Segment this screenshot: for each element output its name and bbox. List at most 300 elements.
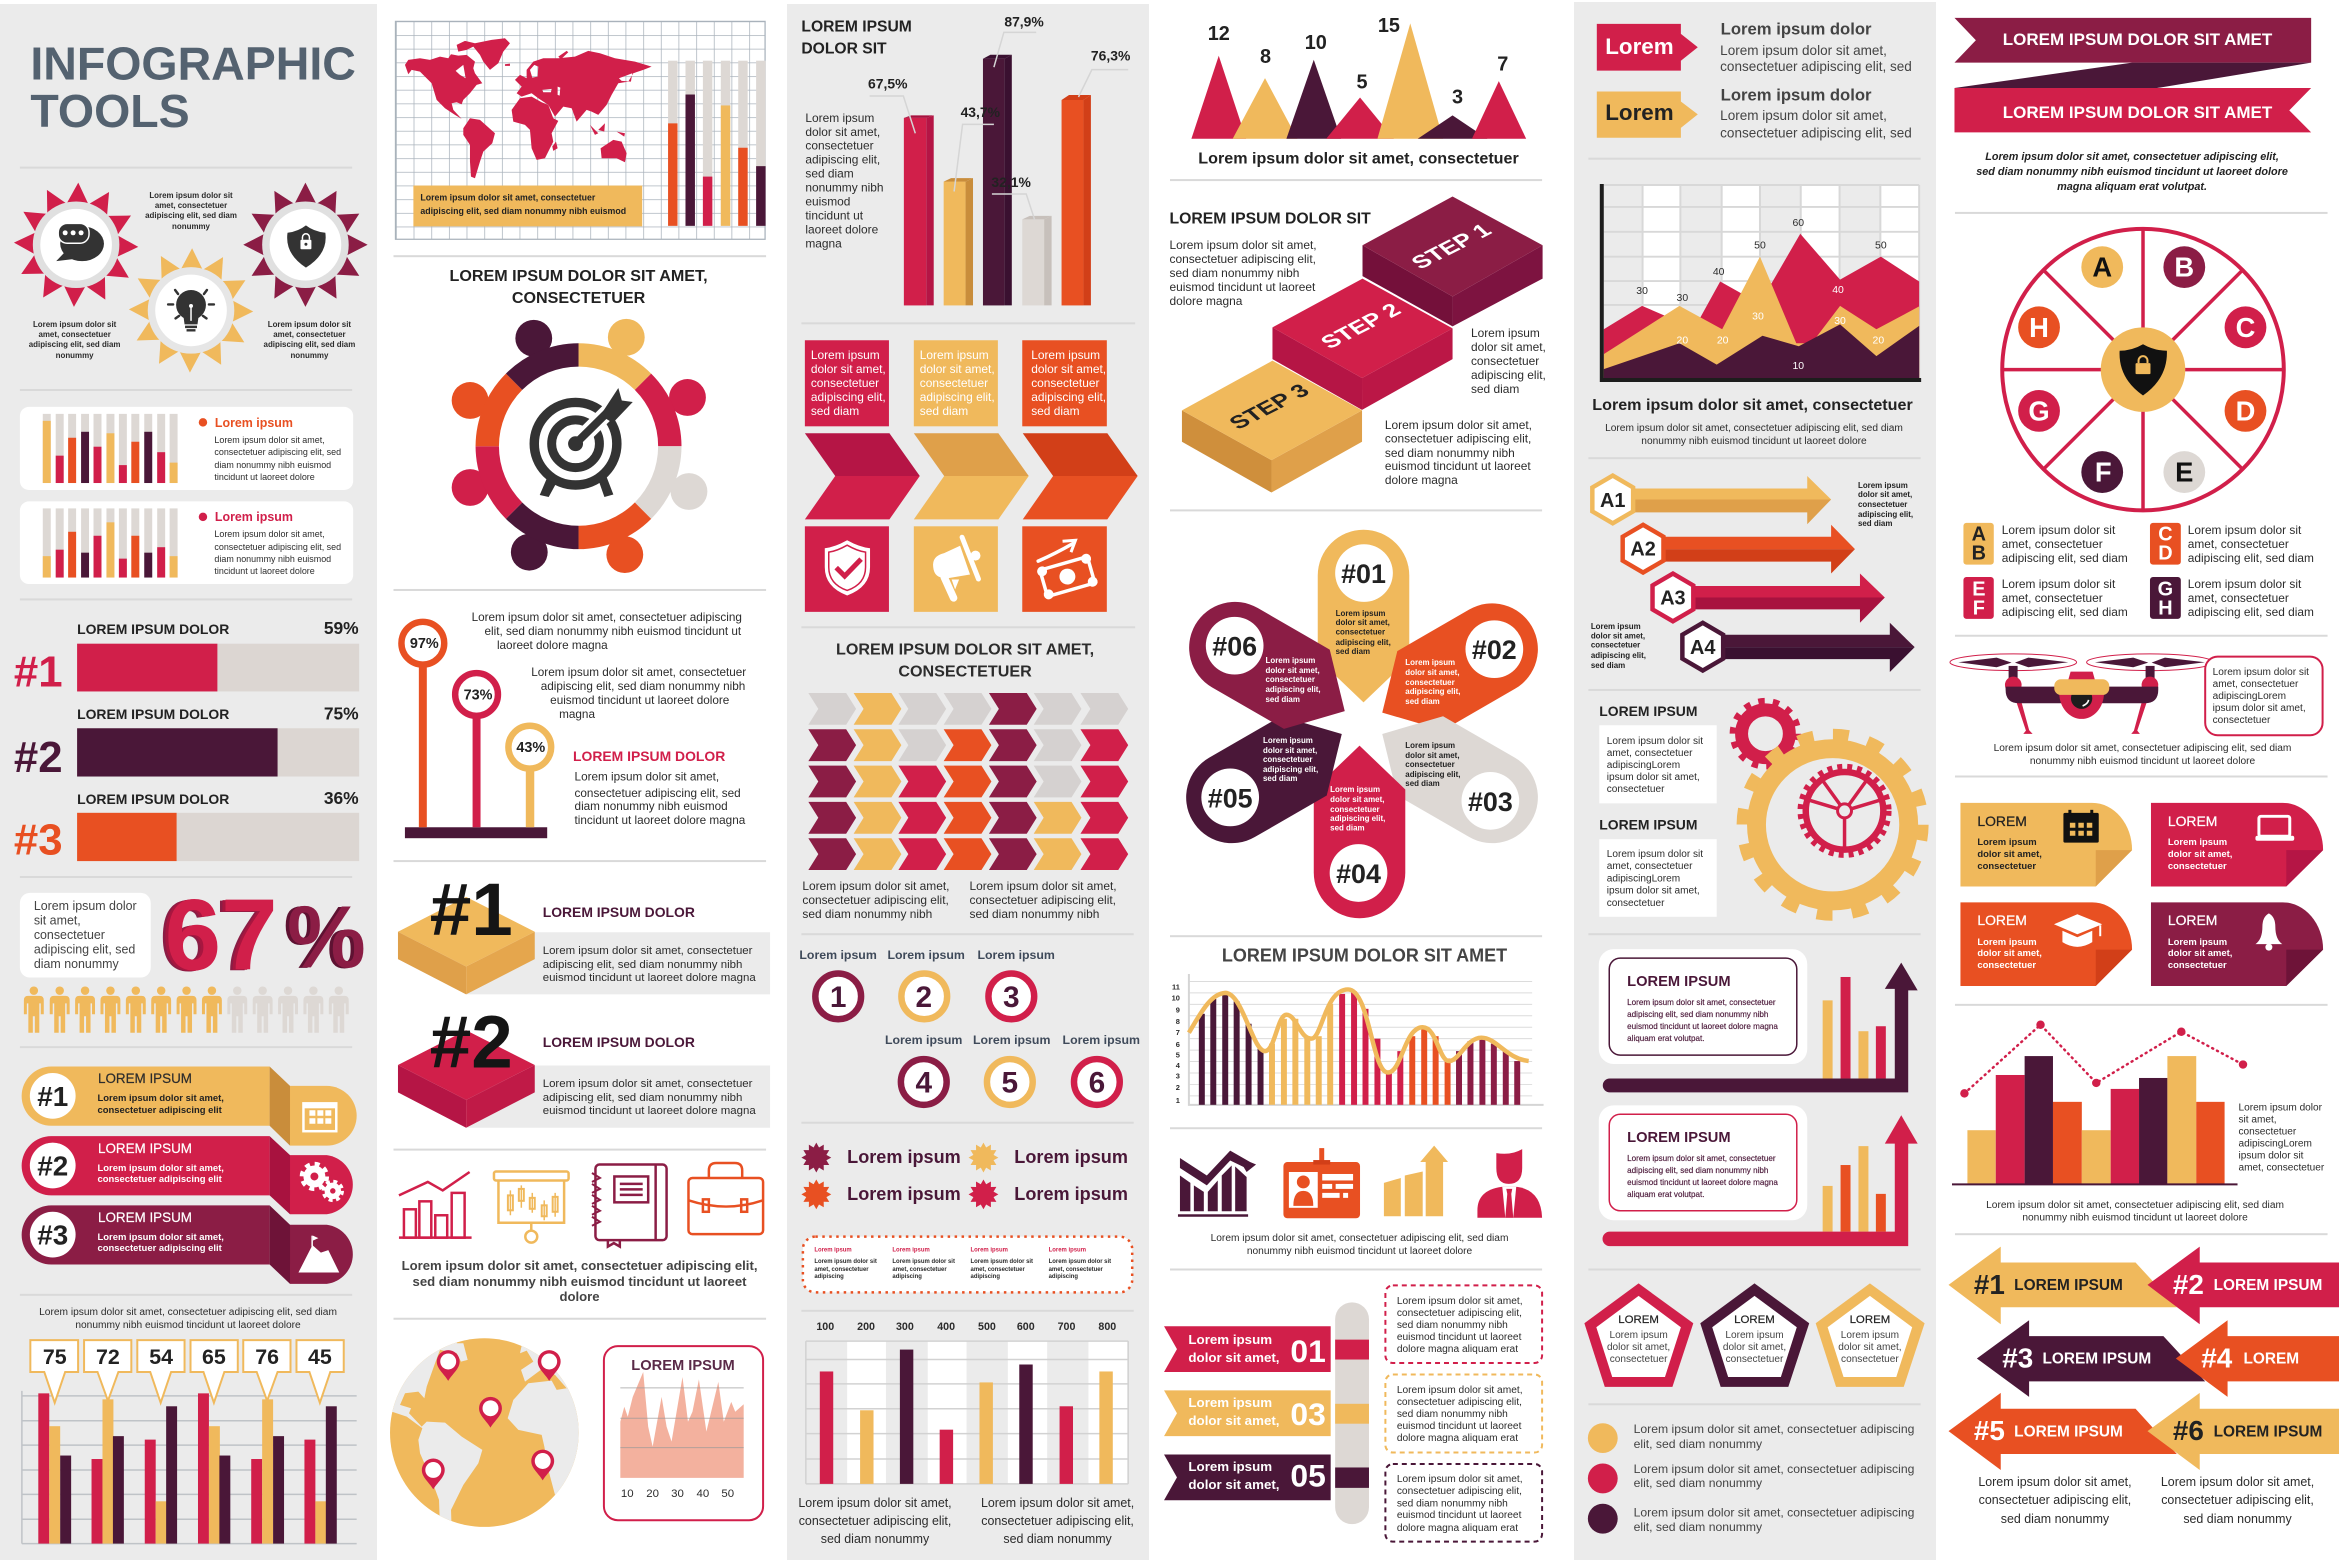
mountain triangles chart: 10: [1305, 32, 1327, 54]
globe: land and ocean: [390, 1338, 579, 1527]
dashed note 3: consectetuer adipiscing elit,: [1397, 1486, 1522, 1497]
text: drone caption: Lorem ipsum dolor sit amet, consectetuer adipiscing elit, sed diam: [1994, 743, 2291, 754]
icon: presentation board: [494, 1171, 569, 1243]
letter wheel: E: [2175, 457, 2193, 488]
folded card wine: consectetuer: [2168, 960, 2227, 971]
growth card 2: Lorem ipsum dolor sit amet, consectetuer: [1627, 1154, 1776, 1163]
area chart card: 50: [721, 1488, 734, 1500]
area chart card: 20: [646, 1488, 659, 1500]
panel: text box yellow: sed diam: [920, 404, 968, 418]
text: step 3 description: euismod tincidunt ut laoreet: [1385, 459, 1531, 473]
area chart: 30: [1752, 311, 1764, 322]
note: gear text 1: ipsum dolor sit amet,: [1607, 772, 1700, 783]
iso block #1: adipiscing elit, sed diam nonummy nibh: [543, 959, 742, 971]
callout: 67 percent text: Lorem ipsum dolor: [34, 899, 137, 913]
petal #01: consectetuer: [1336, 628, 1385, 637]
tag 01: 01: [1290, 1333, 1326, 1369]
callout: drone note: adipiscingLorem: [2213, 691, 2286, 702]
folded card crimson: dolor sit amet,: [2168, 849, 2232, 860]
folded card orange: consectetuer: [1977, 960, 2036, 971]
panel: text box crimson: adipiscing elit,: [811, 390, 886, 404]
area chart: 50: [1754, 241, 1766, 252]
tag 01: [1164, 1326, 1331, 1372]
ribbon #1: consectetuer adipiscing elit: [98, 1105, 223, 1116]
wave bar chart: 11: [1172, 982, 1180, 991]
dashed note 2: Lorem ipsum dolor sit amet,: [1397, 1385, 1523, 1396]
text: chart caption right: Lorem ipsum dolor sit amet,: [981, 1496, 1134, 1510]
dotted callout box: Lorem ipsum dolor sit: [1049, 1259, 1111, 1265]
text: badge caption top: amet, consectetuer: [155, 201, 227, 210]
note: gear text 2: LOREM IPSUM: [1599, 817, 1697, 833]
text: 3D bars description: adipiscing elit,: [805, 153, 880, 167]
text: step 2 description: sed diam: [1471, 382, 1519, 396]
dashed note 1: euismod tincidunt ut laoreet: [1397, 1332, 1522, 1343]
pentagon 2: dolor sit amet,: [1723, 1342, 1786, 1353]
icon: chat badge: [12, 180, 140, 309]
panel: mini bar card 1: tincidunt ut laoreet dolore: [214, 472, 315, 482]
text: badge caption left: nonummy: [56, 351, 94, 360]
text: arrow note left: dolor sit amet,: [1591, 632, 1645, 641]
wave bar chart: 7: [1176, 1028, 1180, 1037]
pentagon 3: Lorem ipsum: [1841, 1330, 1899, 1341]
3D bar chart: 32,1%: [991, 174, 1031, 190]
numbered circles: Lorem ipsum: [1063, 1033, 1140, 1047]
folded card yellow: LOREM: [1977, 813, 2027, 829]
heading: 3D bars: DOLOR SIT: [801, 41, 887, 58]
mountain triangles chart: [1191, 15, 1526, 139]
progress bar #1: LOREM IPSUM DOLOR: [77, 621, 229, 637]
petal #03: #03: [1468, 787, 1513, 817]
area chart: 30: [1636, 286, 1648, 297]
dot list: elit, sed diam nonummy: [1634, 1476, 1763, 1490]
note: gear text 1: LOREM IPSUM: [1599, 703, 1697, 719]
text: step 3 description: sed diam nonummy nibh: [1385, 446, 1515, 460]
text: steps intro: dolore magna: [1170, 294, 1243, 308]
text: arrow note right: dolor sit amet,: [1858, 490, 1912, 499]
petal #02: sed diam: [1405, 697, 1440, 706]
numbered circles: Lorem ipsum: [885, 1033, 962, 1047]
progress bar #2: [14, 703, 359, 782]
text: 3D bars description: Lorem ipsum: [805, 111, 874, 125]
ribbon #2: LOREM IPSUM: [98, 1141, 192, 1156]
panel: text box crimson: Lorem ipsum: [811, 348, 880, 362]
icon: calendar black: [2063, 810, 2099, 843]
starburst legend: [801, 1143, 1128, 1209]
heading: chevron matrix: CONSECTETUER: [898, 663, 1032, 681]
tag 03: [1164, 1390, 1331, 1436]
petal #06: dolor sit amet,: [1266, 666, 1320, 675]
iso block #2: #2: [430, 1000, 513, 1084]
text: arrow note left: Lorem ipsum: [1591, 622, 1641, 631]
petal #05: Lorem ipsum: [1263, 736, 1313, 745]
big number 67 percent: %: [284, 888, 362, 987]
arrow A2: A2: [1630, 539, 1656, 561]
dotted callout box: Lorem ipsum: [971, 1248, 1008, 1254]
text: step 3 description: Lorem ipsum dolor sit amet,: [1385, 418, 1532, 432]
icon: briefcase: [688, 1163, 763, 1234]
dotted callout box: amet, consectetuer: [892, 1267, 947, 1273]
mountain triangles chart: 12: [1208, 23, 1230, 45]
gears: [1733, 701, 1923, 915]
map caption: Lorem ipsum dolor sit amet, consectetuer: [420, 192, 596, 202]
text: badge caption right: nonummy: [290, 351, 329, 360]
note: gear text 2: amet, consectetuer: [1607, 861, 1693, 872]
text: step 3 description: dolore magna: [1385, 473, 1458, 487]
pentagon 2: LOREM: [1734, 1314, 1775, 1326]
folded card yellow: dolor sit amet,: [1977, 849, 2042, 860]
text block: pin 1: Lorem ipsum dolor sit amet, consectetuer adipiscing: [472, 611, 742, 624]
icon: declining chart: [1178, 1151, 1256, 1217]
panel: text box yellow: [914, 340, 998, 426]
pentagon 3: LOREM: [1850, 1314, 1890, 1326]
arrow A1: A1: [1600, 490, 1625, 512]
big number 67 percent: 67: [159, 879, 272, 993]
arrow #2: #2: [2173, 1269, 2204, 1300]
petal #03: adipiscing elit,: [1405, 770, 1460, 779]
banner ribbon: LOREM IPSUM DOLOR SIT AMET: [2003, 103, 2273, 122]
petal #05: consectetuer: [1263, 755, 1312, 764]
pin chart: 43%: [516, 740, 545, 756]
legend: GH: Lorem ipsum dolor sit: [2188, 577, 2302, 591]
dotted callout box: Lorem ipsum: [1049, 1248, 1086, 1254]
progress bar #1: [14, 618, 359, 696]
arrow A2: [1623, 525, 1855, 574]
tag: Lorem yellow: [1597, 92, 1698, 138]
isometric step 1: [1363, 196, 1543, 326]
legend: CD: C: [2158, 524, 2173, 546]
panel: mini bar card 2: Lorem ipsum dolor sit amet,: [214, 529, 325, 539]
text: badge caption top: Lorem ipsum dolor sit: [149, 191, 233, 200]
text: badge caption left: Lorem ipsum dolor sit: [33, 320, 117, 329]
dotted callout box: Lorem ipsum dolor sit: [892, 1259, 955, 1265]
dashed note 3: Lorem ipsum dolor sit amet,: [1397, 1474, 1523, 1485]
growth card 2: euismod tincidunt ut laoreet dolore magna: [1627, 1178, 1778, 1187]
area chart card: [604, 1346, 763, 1520]
growth card 1: [1599, 949, 1918, 1092]
petal #05: #05: [1208, 783, 1253, 813]
callout: 67 percent text: consectetuer: [34, 928, 105, 942]
text: chart caption right: consectetuer adipiscing elit,: [981, 1514, 1134, 1528]
target wheel: [452, 319, 707, 573]
folded card crimson: Lorem ipsum: [2168, 837, 2227, 848]
area chart: 20: [1717, 336, 1729, 347]
text: tag 1 description: Lorem ipsum dolor: [1721, 19, 1872, 38]
legend: EF: adipiscing elit, sed diam: [2002, 605, 2128, 619]
isometric step 3: [1182, 361, 1362, 492]
text: bar chart note: adipiscingLorem: [2239, 1139, 2312, 1150]
petal #02: Lorem ipsum: [1405, 658, 1455, 667]
legend: AB: B: [1972, 543, 1986, 565]
ribbon #3: LOREM IPSUM: [98, 1210, 192, 1225]
grouped bar chart with callouts: 75: [43, 1345, 67, 1369]
petal #04: dolor sit amet,: [1330, 795, 1384, 804]
petal #05: adipiscing elit,: [1263, 765, 1318, 774]
text: 3D bars description: dolor sit amet,: [805, 125, 880, 139]
isometric step 2: [1272, 279, 1453, 410]
ribbon #2: Lorem ipsum dolor sit amet,: [98, 1163, 224, 1174]
petal #01: Lorem ipsum: [1336, 609, 1385, 618]
text block: pin 2: Lorem ipsum dolor sit amet, consectetuer: [531, 666, 746, 679]
mountain triangles chart: 7: [1497, 54, 1508, 76]
people pictogram: [24, 986, 349, 1033]
panel: mini bar card 2: [20, 501, 353, 584]
arrow #6: LOREM IPSUM: [2214, 1424, 2322, 1441]
banner ribbon: [1954, 18, 2311, 132]
text: step 2 description: Lorem ipsum: [1471, 326, 1540, 340]
text: arrows caption right: consectetuer adipiscing elit,: [2161, 1493, 2314, 1507]
folded card yellow: consectetuer: [1977, 861, 2036, 872]
numbered circles: 5: [1002, 1066, 1018, 1099]
text: steps intro: consectetuer adipiscing elit,: [1170, 252, 1316, 266]
dot list: Lorem ipsum dolor sit amet, consectetuer adipiscing: [1634, 1462, 1914, 1476]
text: tag 2 description: Lorem ipsum dolor sit amet,: [1720, 108, 1887, 123]
ribbon #1: #1: [37, 1081, 68, 1112]
wave bar chart: 8: [1176, 1017, 1180, 1026]
icon: line chart: [399, 1172, 472, 1238]
petal #01: sed diam: [1336, 647, 1370, 656]
isometric step 2: STEP 2: [1315, 299, 1406, 353]
petal #04: Lorem ipsum: [1330, 785, 1380, 794]
legend: AB: [1963, 523, 2128, 565]
icon: shield check: [805, 526, 889, 612]
petal #03: dolor sit amet,: [1405, 751, 1460, 760]
isometric step 3: STEP 3: [1223, 379, 1314, 433]
legend: AB: amet, consectetuer: [2002, 537, 2103, 551]
dotted callout box: adipiscing: [971, 1274, 1000, 1280]
letter wheel: B: [2174, 252, 2194, 283]
text: badge caption left: adipiscing elit, sed diam: [29, 340, 120, 349]
folded card crimson: LOREM: [2168, 813, 2217, 829]
pentagon 2: Lorem ipsum: [1725, 1330, 1784, 1341]
petal #04: sed diam: [1330, 824, 1365, 833]
column chart: 500: [978, 1321, 996, 1333]
text: arrows caption left: sed diam nonummy: [2001, 1512, 2110, 1526]
wave bar chart: 4: [1176, 1061, 1181, 1070]
dashed note 1: dolore magna aliquam erat: [1397, 1344, 1518, 1355]
iso block #1: euismod tincidunt ut laoreet dolore magna: [543, 972, 756, 984]
arrow A1: [1592, 476, 1831, 524]
dot list: [1588, 1422, 1914, 1534]
3D bar chart: [868, 13, 1130, 305]
pentagon 3: consectetuer: [1841, 1354, 1899, 1365]
area chart: 60: [1792, 218, 1804, 229]
panel: column 1 background: [0, 4, 377, 1560]
folded card orange: [1960, 902, 2132, 986]
column chart: 800: [1098, 1321, 1116, 1333]
text: 3D bars description: tincidunt ut: [805, 208, 864, 222]
dot list: Lorem ipsum dolor sit amet, consectetuer adipiscing: [1634, 1422, 1914, 1436]
dotted callout box: adipiscing: [1049, 1274, 1078, 1280]
text: tag 1 description: consectetuer adipiscing elit, sed: [1720, 59, 1912, 74]
dot list: elit, sed diam nonummy: [1634, 1437, 1763, 1451]
progress bar #3: [14, 788, 359, 865]
arrow A3: [1653, 574, 1885, 623]
tag: Lorem crimson: Lorem: [1605, 34, 1674, 59]
area chart: 20: [1677, 336, 1688, 347]
area chart: 10: [1792, 361, 1804, 372]
text: chart caption right: sed diam nonummy: [1003, 1532, 1113, 1546]
text block: pin 2: magna: [559, 708, 595, 721]
petal #02: adipiscing elit,: [1405, 687, 1460, 696]
pentagon 1: LOREM: [1618, 1314, 1659, 1326]
dotted callout box: amet, consectetuer: [971, 1267, 1025, 1273]
panel: text box crimson: sed diam: [811, 404, 859, 418]
arrow #4: LOREM: [2243, 1351, 2299, 1368]
legend: GH: adipiscing elit, sed diam: [2188, 605, 2314, 619]
grouped bar chart with callouts: [22, 1340, 357, 1544]
text: chart caption: Lorem ipsum dolor sit amet, consectetuer adipiscing elit, sed diam: [39, 1307, 337, 1318]
callout: 67 percent text: diam nonummy: [34, 957, 120, 971]
panel: mini bar card 1: diam nonummy nibh euismod: [214, 460, 331, 470]
panel: text box yellow: Lorem ipsum: [920, 348, 989, 362]
legend: EF: [1963, 577, 2128, 619]
note: gear text 1: Lorem ipsum dolor sit: [1607, 736, 1703, 747]
dashed note 3: sed diam nonummy nibh: [1397, 1498, 1508, 1509]
growth card 2: [1599, 1105, 1918, 1246]
text: tag 1 description: [1720, 19, 1912, 74]
text: chart caption left: Lorem ipsum dolor sit amet,: [798, 1496, 952, 1510]
callout: drone note: amet, consectetuer: [2213, 679, 2299, 690]
starburst legend: Lorem ipsum: [1014, 1147, 1128, 1167]
icon: drone: [1950, 654, 2213, 734]
area chart card: LOREM IPSUM: [631, 1358, 735, 1374]
petal #04: consectetuer: [1330, 805, 1380, 814]
pin chart: 97%: [410, 636, 439, 652]
legend: AB: Lorem ipsum dolor sit: [2002, 523, 2116, 537]
arrow #5: [1949, 1393, 2177, 1470]
wave bar chart: [1172, 974, 1544, 1105]
progress bar #1: 59%: [324, 618, 359, 638]
panel: mini bar card 1: Lorem ipsum: [215, 416, 293, 430]
text: bar chart caption: nonummy nibh euismod tincidunt ut laoreet dolore: [2022, 1213, 2248, 1224]
wave bar chart: 6: [1176, 1040, 1180, 1049]
dashed note 3: dolore magna aliquam erat: [1397, 1523, 1518, 1534]
letter wheel: C: [2236, 312, 2255, 343]
text: 3D bars description: consectetuer: [805, 139, 874, 153]
petal #06: consectetuer: [1266, 675, 1315, 684]
heading: target: LOREM IPSUM DOLOR SIT AMET,: [450, 267, 708, 285]
iso block #2: [398, 1000, 770, 1128]
tag 05: Lorem ipsum: [1188, 1459, 1272, 1474]
letter wheel: H: [2029, 312, 2049, 343]
text block: pin 2: euismod tincidunt ut laoreet dolore: [550, 694, 729, 707]
wave bar chart: 9: [1176, 1005, 1180, 1014]
chevron matrix: [808, 693, 1128, 870]
arrow #1: LOREM IPSUM: [2014, 1277, 2123, 1294]
text: badge caption right: adipiscing elit, sed diam: [264, 340, 355, 349]
icon: money arrow: [1022, 526, 1107, 612]
callout: drone note: Lorem ipsum dolor sit: [2213, 667, 2309, 678]
icon: notebook: [592, 1165, 667, 1247]
legend: EF: E: [1972, 578, 1985, 600]
big number 67 percent: %: [287, 888, 366, 987]
note: gear text 1: consectetuer: [1607, 784, 1665, 795]
text: italic intro: magna aliquam erat volutpat.: [2057, 181, 2207, 193]
tag 01: dolor sit amet,: [1188, 1350, 1280, 1365]
text: arrow note right: sed diam: [1858, 519, 1892, 528]
folded card crimson: consectetuer: [2168, 861, 2227, 872]
dashed note 3: [1385, 1464, 1542, 1542]
note: gear text 2: Lorem ipsum dolor sit: [1607, 849, 1703, 860]
pin chart: 73%: [464, 687, 493, 703]
numbered circles: 1: [830, 981, 846, 1014]
icon: ID card: [1283, 1148, 1360, 1218]
dashed note 1: [1385, 1285, 1542, 1363]
text: icons caption: dolore: [559, 1289, 600, 1304]
numbered circles: Lorem ipsum: [977, 948, 1055, 962]
text: 3D bars description: laoreet dolore: [805, 222, 879, 236]
big number 67 percent: [159, 878, 366, 993]
iso block #1: Lorem ipsum dolor sit amet, consectetuer: [543, 945, 753, 957]
text: 3D bars description: sed diam: [805, 167, 854, 181]
petal #01: adipiscing elit,: [1336, 638, 1391, 647]
text block: pin 1: laoreet dolore magna: [497, 639, 608, 652]
iso block #1: LOREM IPSUM DOLOR: [543, 904, 695, 920]
iso block #1: [398, 867, 770, 994]
text: chart caption left: consectetuer adipiscing elit,: [799, 1514, 951, 1528]
text: tag 2 description: [1720, 85, 1912, 140]
pentagon 1: Lorem ipsum: [1609, 1330, 1668, 1341]
petal #04: adipiscing elit,: [1330, 814, 1385, 823]
dotted callout box: amet, consectetuer: [814, 1267, 869, 1273]
text: icons caption: Lorem ipsum dolor sit amet, consectetuer adipiscing elit, sed diam: [1211, 1233, 1508, 1244]
numbered circles: Lorem ipsum: [973, 1033, 1050, 1047]
numbered circles: Lorem ipsum: [887, 948, 965, 962]
icon: growth arrow bars: [1384, 1146, 1448, 1216]
legend: CD: [2150, 523, 2314, 565]
note: gear text 1: adipiscingLorem: [1607, 760, 1680, 771]
pentagon 1: [1584, 1283, 1693, 1387]
dashed note 2: consectetuer adipiscing elit,: [1397, 1397, 1522, 1408]
legend: EF: F: [1973, 597, 1985, 619]
text: tag 2 description: consectetuer adipiscing elit, sed: [1720, 125, 1912, 140]
icon: calendar: [303, 1103, 336, 1131]
arrow #5: LOREM IPSUM: [2014, 1424, 2123, 1441]
dotted callout box: Lorem ipsum: [814, 1248, 852, 1254]
progress bar #3: 36%: [324, 788, 359, 808]
text: steps intro: sed diam nonummy nibh: [1170, 266, 1299, 280]
text: steps intro: euismod tincidunt ut laoreet: [1170, 280, 1316, 294]
ribbon #3: Lorem ipsum dolor sit amet,: [98, 1232, 224, 1243]
ribbon #3: #3: [37, 1220, 68, 1251]
area chart: 50: [1875, 241, 1887, 252]
arrow #1: [1949, 1247, 2177, 1324]
ribbon #2: #2: [37, 1150, 68, 1181]
folded card orange: LOREM: [1977, 912, 2027, 928]
dotted callout box: adipiscing: [814, 1274, 844, 1280]
icon: lock shield badge: [243, 183, 368, 307]
text: chevron caption left: Lorem ipsum dolor sit amet,: [802, 879, 949, 893]
note: gear text 2: ipsum dolor sit amet,: [1607, 885, 1700, 896]
pentagon 3: dolor sit amet,: [1838, 1342, 1902, 1353]
area chart: [1602, 184, 1921, 380]
growth card 1: Lorem ipsum dolor sit amet, consectetuer: [1627, 998, 1776, 1007]
growth card 2: LOREM IPSUM: [1627, 1130, 1731, 1146]
3D bar chart: 87,9%: [1004, 13, 1044, 29]
text: bar chart note: consectetuer: [2239, 1127, 2297, 1138]
arrow #5: #5: [1974, 1415, 2005, 1446]
petal #01: [1318, 530, 1409, 702]
starburst legend: Lorem ipsum: [847, 1184, 961, 1204]
bar and dotted line chart: [1952, 1021, 2247, 1184]
text: step 2 description: adipiscing elit,: [1471, 368, 1546, 382]
folded card yellow: [1960, 803, 2132, 886]
text: badge caption left: amet, consectetuer: [38, 330, 111, 339]
petal #03: [1359, 694, 1555, 860]
big number 67 percent: 67: [162, 878, 275, 992]
text: arrow note right: adipiscing elit,: [1858, 510, 1913, 519]
legend: EF: Lorem ipsum dolor sit: [2002, 577, 2116, 591]
